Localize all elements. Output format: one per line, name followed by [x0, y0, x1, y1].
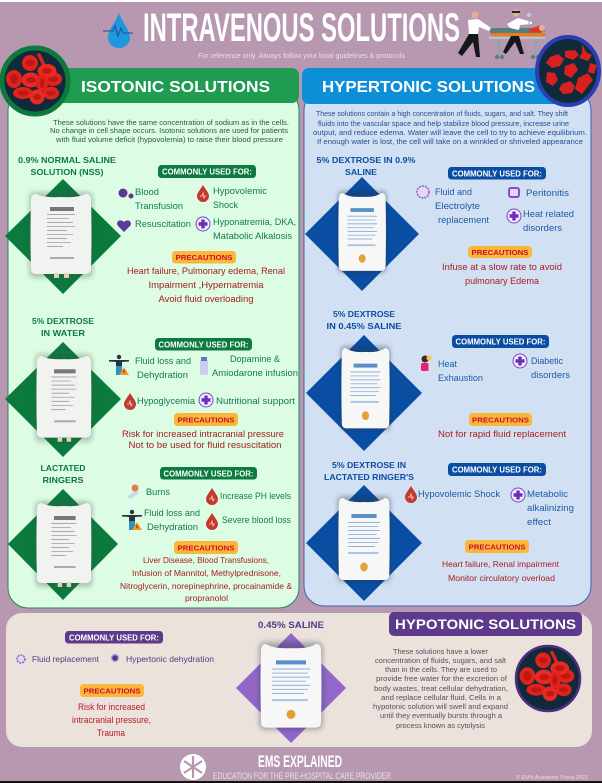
use: hypovolemic shock: Hypovolemic: [213, 186, 267, 197]
precautions pill: PRECAUTIONS: [84, 686, 140, 696]
bottom edge: [0, 781, 602, 783]
precautions text: propranolol: [185, 593, 228, 603]
precautions text: Heart failure, Pulmonary edema, Renal: [127, 266, 285, 277]
use: diabetic disorders: disorders: [531, 370, 570, 381]
use: resuscitation: Resuscitation: [135, 219, 191, 230]
section: 5% dextrose in 0.9% saline: [305, 155, 574, 291]
precautions pill: [174, 541, 238, 554]
heading: SALINE: [345, 167, 377, 177]
IV bag: [337, 191, 387, 273]
heading: 5% DEXTROSE: [32, 316, 94, 326]
icon: electrolyte: [417, 186, 429, 198]
isotonic header: [40, 68, 299, 103]
use: fluid and electrolyte: [435, 187, 489, 226]
diamond: [236, 633, 346, 743]
diamond: [305, 177, 419, 291]
diamond: [306, 485, 422, 601]
use: diabetic disorders: Diabetic: [531, 356, 563, 367]
subtitle: For reference only. Always follow your local guidelines & protocols: [198, 51, 405, 60]
heading: RINGERS: [42, 475, 84, 485]
heading: SOLUTION (NSS): [30, 167, 104, 177]
precautions text: [122, 429, 284, 451]
hypotonic text: hypotonic solution will swell and expand: [373, 702, 508, 711]
hypertonic intro: output, and reduce edema. Water will leave the cell to try to achieve equilibrium.: [313, 128, 587, 137]
use: metabolic alkalinizing effect: Metabolic: [527, 489, 568, 500]
use: nutritional support: Nutritional support: [216, 396, 295, 407]
hypertonic heading: HYPERTONIC SOLUTIONS: [322, 79, 535, 96]
use: heat related: Heat related: [523, 209, 574, 220]
precautions pill: [172, 251, 236, 264]
isotonic body: [8, 90, 299, 608]
heading: [40, 463, 86, 485]
icon: hypertonic dehydration: [112, 654, 118, 662]
hypertonic intro: fluids into the vascular space and help stabilize blood pressure, increase urine: [318, 119, 569, 128]
icon: plus: [513, 354, 527, 368]
precautions text: [120, 555, 292, 603]
diamond: [5, 179, 121, 294]
hypotonic header: [389, 612, 582, 636]
precautions pill: [174, 413, 238, 426]
icon: vial: [200, 357, 208, 375]
icon: water drop with pulse: [103, 13, 133, 48]
icon: drop: [206, 488, 218, 505]
precautions text: [442, 559, 560, 583]
icon: drop: [124, 393, 136, 410]
isotonic intro: [50, 118, 289, 144]
icon: paramedics with stretcher: [458, 10, 545, 59]
use: hyponatremia: Matabolic Alkalosis: [213, 231, 292, 242]
hypotonic heading: HYPOTONIC SOLUTIONS: [395, 616, 576, 632]
use: fluid and electrolyte: replacement: [438, 215, 489, 226]
precautions text: Not for rapid fluid replacement: [438, 429, 566, 440]
precautions text: Risk for increased intracranial pressure: [122, 429, 284, 440]
hypotonic text: than in the cells. They are used to: [385, 665, 497, 674]
heading: 5% DEXTROSE IN: [332, 460, 406, 470]
use: fluid and electrolyte: Electrolyte: [435, 201, 480, 212]
heading: IN 0.45% SALINE: [326, 321, 402, 331]
commonly used pill: COMMONLY USED FOR:: [452, 169, 542, 178]
hypotonic text: concentration of fluids, sugars, and salt: [375, 656, 507, 665]
icon: drop: [197, 185, 209, 202]
icon: heart: [117, 220, 131, 232]
hypotonic text: [373, 647, 508, 730]
commonly used pill: [158, 165, 256, 178]
use: blood transfusion: [135, 187, 183, 212]
use: fluid loss: Fluid loss and: [135, 356, 191, 367]
heading: IN WATER: [41, 328, 85, 338]
use: fluid and electrolyte: Fluid and: [435, 187, 472, 198]
precautions text: Avoid fluid overloading: [158, 294, 254, 305]
use: heat exhaustion: [438, 359, 483, 384]
precautions text: Impairment ,Hypernatremia: [148, 280, 264, 291]
isotonic intro: No change in cell shape occurs. Isotonic solutions are used for patients: [50, 126, 288, 135]
precautions text: Infuse at a slow rate to avoid: [442, 262, 562, 273]
icon: plus: [511, 488, 525, 502]
isotonic intro: These solutions have the same concentration of sodium as in the cells.: [53, 118, 289, 127]
use: fluid loss: Dehydration: [147, 522, 198, 533]
IV bag: [259, 642, 323, 730]
use: metabolic alkalinizing effect: effect: [527, 517, 551, 528]
heading: 0.9% NORMAL SALINE: [18, 155, 116, 165]
use: metabolic alkalinizing effect: alkalinizing: [527, 503, 574, 514]
use: heat exhaustion: Heat: [438, 359, 457, 370]
use: increase ph levels: Increase PH levels: [220, 491, 291, 502]
heading: [324, 460, 414, 482]
use: diabetic disorders: [531, 356, 570, 381]
copyright: © EM's Academic Press 2022: [516, 774, 588, 781]
precautions pill: PRECAUTIONS: [178, 544, 234, 552]
use: heat exhaustion: Exhaustion: [438, 373, 483, 384]
precautions text: Liver Disease, Blood Transfusions,: [143, 555, 269, 565]
diamond: [5, 342, 121, 457]
hypertonic intro: These solutions contain a high concentration of fluids, sugars, and salt. They shift: [316, 109, 569, 118]
IV bag: [35, 501, 93, 587]
diamond: [306, 335, 422, 451]
use: heat related: disorders: [523, 223, 562, 234]
hypotonic text: and replace cellular fluid. Cells in a: [381, 693, 502, 702]
use: hyponatremia: Hyponatremia, DKA,: [213, 217, 296, 228]
panel: isotonic solutions: [5, 68, 299, 608]
precautions pill: PRECAUTIONS: [176, 253, 232, 262]
section: 5% dextrose in 0.45% saline: [306, 309, 570, 451]
heading: LACTATED: [40, 463, 86, 473]
use: severe blood loss: Severe blood loss: [222, 515, 291, 526]
icon: crenated red blood cells: [537, 37, 599, 105]
precautions text: intracranial pressure,: [72, 715, 151, 725]
commonly used pill: COMMONLY USED FOR:: [158, 340, 248, 350]
precautions pill: PRECAUTIONS: [178, 416, 234, 424]
precautions text: Heart failure, Renal impairment: [442, 559, 560, 569]
IV bag: [340, 346, 391, 430]
icon: plus: [199, 393, 213, 407]
use: hypovolemic shock: Hypovolemic Shock: [418, 489, 500, 500]
use: blood transfusion: Blood: [135, 187, 159, 198]
hypotonic text: provide free water for the excretion of: [376, 674, 508, 683]
icon: drop: [405, 486, 417, 503]
precautions text: Trauma: [97, 728, 125, 738]
commonly used pill: [160, 467, 257, 480]
precautions text: Infusion of Mannitol, Methylprednisone,: [132, 568, 281, 578]
icon: blood drops: [118, 188, 134, 198]
footer tagline: EDUCATION FOR THE PRE-HOSPITAL CARE PROVIDER: [213, 771, 391, 782]
hypotonic text: These solutions have a lower: [393, 647, 488, 656]
heading: [326, 309, 402, 331]
use: blood transfusion: Transfusion: [135, 201, 183, 212]
commonly used pill: [155, 338, 252, 350]
precautions text: [442, 262, 562, 287]
hypotonic text: process known as cytolysis: [396, 721, 485, 730]
use: hypoglycemia: Hypoglycemia: [137, 396, 196, 407]
icon: person with warning: [122, 510, 142, 530]
precautions text: [72, 702, 151, 738]
heading: [32, 316, 94, 338]
footer logo: [180, 754, 206, 780]
IV bag: [337, 496, 391, 582]
commonly used pill: COMMONLY USED FOR:: [69, 634, 159, 642]
commonly used pill: COMMONLY USED FOR:: [452, 466, 542, 475]
precautions pill: PRECAUTIONS: [472, 248, 528, 257]
icon: drop: [206, 513, 218, 530]
use: hypovolemic shock: Shock: [213, 200, 238, 211]
use: peritonitis: Peritonitis: [526, 188, 569, 199]
commonly used pill: COMMONLY USED FOR:: [164, 470, 254, 478]
icon: plus: [507, 209, 521, 223]
diamond: [8, 489, 118, 600]
section: normal saline: [5, 155, 296, 305]
use: hypertonic dehydration: Hypertonic dehydration: [126, 654, 214, 664]
use: hypovolemic shock: [213, 186, 267, 211]
use: fluid loss: Fluid loss and: [144, 508, 200, 519]
icon: isotonic red blood cells: [2, 48, 68, 114]
icon: plus: [196, 217, 210, 231]
precautions pill: PRECAUTIONS: [468, 542, 526, 552]
use: dopamine: Dopamine &: [230, 354, 281, 365]
hypotonic text: body wastes, treat cellular dehydration,: [374, 684, 508, 693]
icon: fluid replacement: [17, 655, 25, 663]
icon: intestine: [509, 188, 519, 197]
IV bag: [29, 192, 93, 278]
icon: person with heat: [421, 356, 432, 371]
use: dopamine: [212, 354, 298, 379]
use: dopamine: Amiodarone infusion: [212, 368, 298, 379]
precautions pill: PRECAUTIONS: [472, 416, 529, 424]
hypertonic intro: [313, 109, 587, 146]
precautions pill: [80, 684, 144, 697]
use: metabolic alkalinizing effect: [527, 489, 574, 528]
panel: hypertonic solutions: [302, 68, 591, 606]
heading: LACTATED RINGER'S: [324, 472, 414, 482]
bag heading: 0.45% SALINE: [258, 620, 324, 630]
top edge: [0, 0, 602, 2]
precautions text: Risk for increased: [78, 702, 145, 712]
precautions pill: [469, 413, 532, 426]
use: fluid loss: Dehydration: [137, 370, 188, 381]
section: 5% dextrose in water: [5, 316, 298, 457]
footer title: EMS EXPLAINED: [258, 753, 342, 771]
precautions text: pulmonary Edema: [465, 276, 540, 287]
hypotonic text: until they eventually bursts through a: [380, 711, 503, 720]
precautions text: Nitroglycerin, norepinephrine, procainamide &: [120, 581, 292, 591]
precautions pill: [468, 246, 532, 258]
section: lactated ringers: [8, 463, 292, 603]
hypotonic body: [6, 613, 592, 747]
hypertonic intro: If enough water is lost, the cell will take on a wrinkled or shriveled appearance: [317, 137, 583, 146]
panel: hypotonic solutions: [6, 612, 592, 747]
commonly used pill: [65, 631, 163, 644]
commonly used pill: [448, 463, 546, 476]
commonly used pill: COMMONLY USED FOR:: [456, 338, 546, 347]
heading: 5% DEXTROSE: [333, 309, 395, 319]
use: hyponatremia: [213, 217, 296, 242]
precautions text: Monitor circulatory overload: [448, 573, 555, 583]
precautions pill: [465, 540, 529, 553]
hypertonic header: [302, 68, 562, 104]
commonly used pill: [448, 167, 546, 180]
isotonic heading: ISOTONIC SOLUTIONS: [81, 79, 270, 96]
heading: 5% DEXTROSE IN 0.9%: [316, 155, 416, 165]
icon: person with warning: [109, 355, 129, 375]
icon: burn: [127, 484, 139, 499]
heading: [316, 155, 416, 177]
commonly used pill: COMMONLY USED FOR:: [162, 168, 252, 177]
use: fluid loss: [135, 356, 191, 381]
section: 5% dextrose in lactated ringers: [306, 460, 574, 601]
use: heat related: [523, 209, 574, 234]
use: burns: Burns: [146, 487, 170, 498]
IV bag: [35, 354, 93, 442]
heading: [18, 155, 116, 177]
use: fluid replacement: Fluid replacement: [32, 654, 100, 664]
commonly used pill: [452, 335, 549, 348]
precautions text: Not to be used for fluid resuscitation: [128, 440, 282, 451]
use: fluid loss: [144, 508, 200, 533]
precautions text: [127, 266, 285, 305]
isotonic intro: with fluid volume deficit (hypovolemia) to raise their blood pressure: [55, 135, 283, 144]
hypertonic body: [304, 90, 591, 606]
icon: hypotonic red blood cells: [516, 646, 580, 711]
